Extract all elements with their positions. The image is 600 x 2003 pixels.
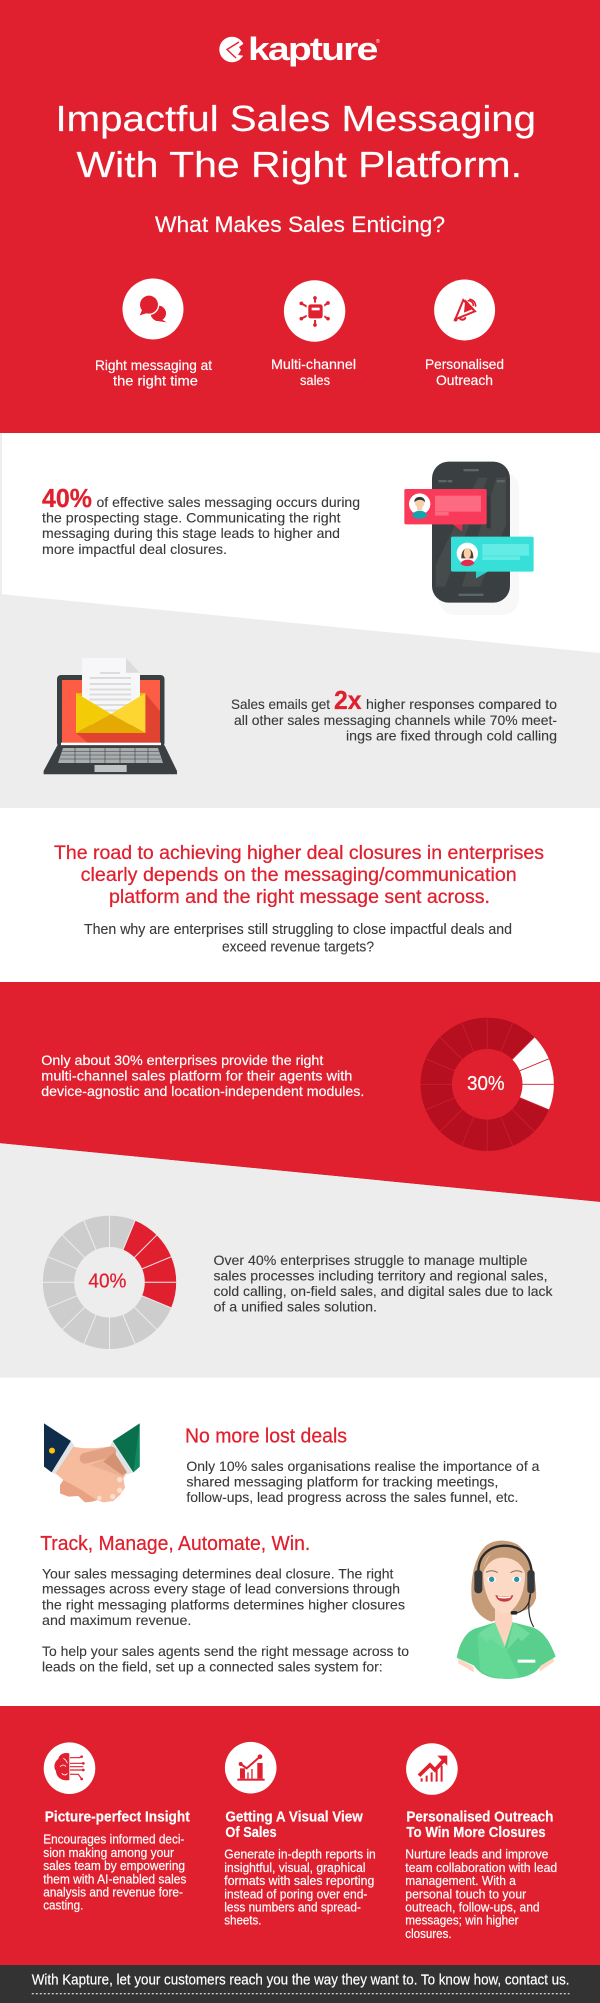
- text: sales messaging determines closure: leads on the field, set up a connected sales system for:: [42, 1659, 383, 1675]
- column: personalised outreach: closures.: [405, 1927, 452, 1941]
- label: multi-channel sales: [271, 356, 356, 388]
- text: 40% prospecting stage: more impactful deal closures.: [42, 541, 227, 557]
- logo: kapture: kapture: [248, 31, 377, 67]
- text: 30% enterprises: device-agnostic and location-independent modules.: [41, 1083, 364, 1099]
- text: 40% prospecting stage: 40%: [42, 483, 92, 513]
- text: sales messaging determines closure: [42, 1565, 409, 1675]
- title: With The Right Platform.: [76, 144, 522, 185]
- text: sales messaging determines closure: the right messaging platforms determines higher closures: [42, 1596, 405, 1612]
- column: getting a visual view: insightful, visual, graphical: [224, 1861, 366, 1875]
- column: personalised outreach: messages; win higher: [405, 1914, 519, 1928]
- text: 40% enterprises struggle: cold calling, on-field sales, and digital sales due to lack: [214, 1283, 553, 1299]
- column: getting a visual view: Getting A Visual View: [225, 1810, 363, 1826]
- text: shared messaging platform: [186, 1458, 540, 1505]
- heading: no more lost deals: No more lost deals: [185, 1425, 347, 1447]
- icon: laptop with envelope: [44, 658, 177, 774]
- icon: support agent with headset: [457, 1541, 556, 1679]
- icon: bar chart with trend line: [225, 1742, 276, 1793]
- text: 2x email responses: 2x: [334, 685, 362, 715]
- icon: chat bubbles: [122, 278, 184, 340]
- red chat bubble: [404, 489, 487, 531]
- text: 2x email responses: higher responses compared to: [366, 696, 557, 712]
- text: 30% enterprises: [41, 1052, 364, 1099]
- title: Impactful Sales Messaging: [56, 98, 536, 139]
- column: picture-perfect insight: sion making among your: [43, 1846, 174, 1860]
- column: picture-perfect insight: casting.: [43, 1899, 83, 1913]
- text: 40% enterprises struggle: Over 40% enterprises struggle to manage multiple: [214, 1252, 528, 1268]
- label: multi-channel sales: Multi-channel: [271, 356, 356, 372]
- icon: AI brain: [44, 1742, 95, 1794]
- column: picture-perfect insight: them with AI-enabled sales: [43, 1872, 186, 1886]
- column: picture-perfect insight: [43, 1810, 190, 1913]
- donut chart: 40%: 40%: [88, 1270, 127, 1292]
- label: right messaging: Right messaging at: [95, 357, 212, 373]
- text: 40% prospecting stage: the prospecting stage. Communicating the right: [42, 510, 341, 526]
- column: getting a visual view: Of Sales: [225, 1825, 277, 1841]
- icon: handshake: [44, 1423, 140, 1502]
- red heading: [54, 843, 544, 908]
- label: multi-channel sales: sales: [300, 372, 330, 388]
- question text: exceed revenue targets?: [222, 940, 374, 956]
- heading: track manage automate win: Track, Manage, Automate, Win.: [40, 1533, 310, 1555]
- text: 2x email responses: Sales emails get: [231, 696, 330, 712]
- column: personalised outreach: [405, 1810, 557, 1941]
- text: 2x email responses: ings are fixed through cold calling: [346, 728, 557, 744]
- column: picture-perfect insight: sales team by empowering: [43, 1859, 185, 1873]
- envelope back: [76, 693, 145, 714]
- label: right messaging: [95, 357, 212, 389]
- text: shared messaging platform: follow-ups, lead progress across the sales funnel, etc.: [186, 1489, 518, 1505]
- text: 40% prospecting stage: of effective sales messaging occurs during: [96, 494, 360, 510]
- column: getting a visual view: [224, 1810, 376, 1928]
- donut chart: 40%: [42, 1215, 176, 1349]
- icon: growth arrow: [406, 1743, 458, 1795]
- column: personalised outreach: Personalised Outreach: [406, 1810, 553, 1826]
- donut chart: 30%: [420, 1017, 554, 1151]
- question text: [84, 922, 512, 956]
- subtitle: What Makes Sales Enticing?: [155, 212, 445, 237]
- panel: road to deal closures: [0, 808, 600, 982]
- label: personalised outreach: Outreach: [436, 372, 493, 388]
- column: personalised outreach: management. With a: [405, 1874, 516, 1888]
- column: picture-perfect insight: analysis and revenue fore-: [43, 1886, 183, 1900]
- logo: kapture: [219, 31, 380, 67]
- text: shared messaging platform: shared messaging platform for tracking meetings,: [186, 1474, 498, 1490]
- question text: Then why are enterprises still struggling to close impactful deals and: [84, 922, 512, 938]
- column: getting a visual view: instead of poring over end-: [224, 1887, 367, 1901]
- panel: grey 40% section: [0, 1143, 600, 1378]
- panel: footer call to action: [0, 1965, 600, 2003]
- text: sales messaging determines closure: Your sales messaging determines deal closure. The right: [42, 1565, 394, 1581]
- column: personalised outreach: team collaboration with lead: [405, 1861, 557, 1875]
- text: 40% enterprises struggle: [214, 1252, 553, 1315]
- title: [56, 98, 536, 185]
- column: getting a visual view: less numbers and spread-: [224, 1901, 361, 1915]
- red heading: platform and the right message sent across.: [109, 887, 490, 908]
- column: picture-perfect insight: Encourages informed deci-: [43, 1833, 185, 1847]
- teal chat bubble: [451, 537, 534, 578]
- panel: red 30% section: [0, 982, 600, 1202]
- text: 40% enterprises struggle: sales processes including territory and regional sales,: [214, 1268, 548, 1284]
- text: 2x email responses: [231, 685, 557, 744]
- text: 40% prospecting stage: [42, 483, 360, 557]
- text: 40% enterprises struggle: of a unified sales solution.: [214, 1299, 377, 1315]
- column: personalised outreach: personal touch to your: [405, 1887, 526, 1901]
- icon: phone with chat bubbles: [404, 462, 534, 615]
- column: getting a visual view: sheets.: [224, 1914, 261, 1928]
- column: personalised outreach: outreach, follow-ups, and: [405, 1901, 540, 1915]
- text: 40% prospecting stage: messaging during this stage leads to higher and: [42, 525, 340, 541]
- panel: white lost deals and track section: [0, 1378, 600, 1706]
- text: sales messaging determines closure: messages across every stage of lead conversions through: [42, 1581, 400, 1597]
- panel: red features: [0, 1706, 600, 1965]
- text: 30% enterprises: multi-channel sales platform for their agents with: [41, 1068, 352, 1084]
- panel: red header: [0, 0, 600, 433]
- text: sales messaging determines closure: and maximum revenue.: [42, 1612, 191, 1628]
- column: getting a visual view: Generate in-depth reports in: [224, 1848, 376, 1862]
- label: right messaging: the right time: [113, 373, 198, 389]
- text: sales messaging determines closure: To help your sales agents send the right message across to: [42, 1643, 409, 1659]
- text: 30% enterprises: Only about 30% enterprises provide the right: [41, 1052, 323, 1068]
- text: shared messaging platform: Only 10% sales organisations realise the importance of a: [186, 1458, 540, 1474]
- panel: white and grey diagonal section: [0, 433, 600, 808]
- icon: megaphone: [434, 280, 495, 340]
- text: 2x email responses: all other sales messaging channels while 70% meet-: [234, 712, 557, 728]
- column: picture-perfect insight: Picture-perfect Insight: [45, 1810, 190, 1826]
- red heading: The road to achieving higher deal closures in enterprises: [54, 843, 544, 864]
- column: personalised outreach: To Win More Closures: [406, 1825, 546, 1841]
- label: personalised outreach: [425, 356, 504, 388]
- logo: kapture: ®: [376, 38, 380, 45]
- red heading: clearly depends on the messaging/communication: [81, 865, 517, 886]
- column: getting a visual view: formats with sales reporting: [224, 1874, 374, 1888]
- paper letter: [82, 658, 140, 725]
- icon: multi-channel hub: [284, 280, 345, 342]
- envelope front: [76, 693, 145, 733]
- column: personalised outreach: Nurture leads and improve: [405, 1848, 548, 1862]
- label: personalised outreach: Personalised: [425, 356, 504, 372]
- donut chart: 30%: 30%: [467, 1073, 505, 1095]
